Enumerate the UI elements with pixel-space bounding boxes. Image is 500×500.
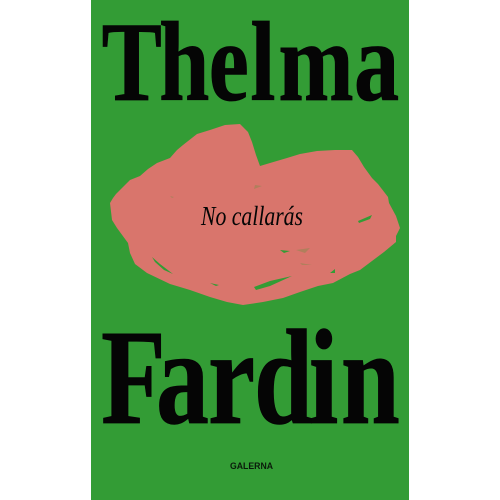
author surname: Fardin [101, 303, 400, 453]
book title: No callarás [200, 201, 303, 231]
publisher: GALERNA [230, 461, 273, 471]
author first name: Thelma [102, 1, 399, 125]
pink blob [110, 124, 400, 305]
